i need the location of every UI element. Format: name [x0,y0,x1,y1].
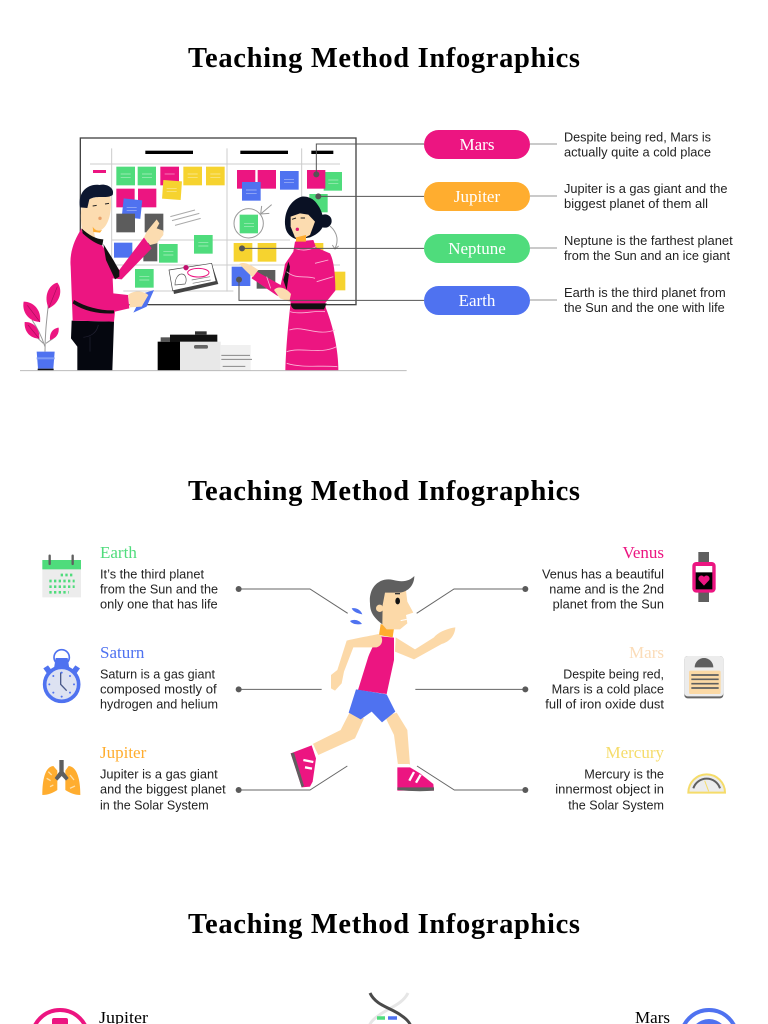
text: Earth description: Earth is the third planet from [564,286,726,300]
sticky notes [114,167,345,290]
block: Earth: It’s the third planet [100,568,205,582]
text: Jupiter description: biggest planet of them all [564,197,708,211]
block: Saturn: Saturn is a gas giant [100,668,216,682]
man [70,185,163,371]
icon: lungs [42,760,80,795]
icon: weighing scale [684,656,723,698]
block: Saturn: composed mostly of [100,682,217,696]
ground line [20,369,407,372]
block: Mars: Despite being red, [563,668,664,682]
circled note and arrow [234,205,339,249]
block: Mercury [555,743,725,812]
block: Earth: only one that has life [100,598,218,612]
pill: Mars [424,130,530,159]
pill: Jupiter [424,182,530,211]
block: Mars: Mars is a cold place [552,682,664,696]
woman [239,197,338,371]
text: Jupiter description: Jupiter is a gas giant and the [564,182,728,196]
block: Mars: full of iron oxide dust [545,698,665,712]
sweat drops [350,608,362,624]
icon: calendar [42,556,81,597]
block: Earth: Earth [100,543,137,562]
block: Saturn [43,643,218,712]
text: Mars description: Despite being red, Mars is [564,130,711,144]
text: Neptune description: Neptune is the farthest planet [564,234,733,248]
pill: Earth: Earth [459,291,496,310]
icon: blue circle [681,1010,737,1024]
block: Jupiter: Jupiter is a gas giant [100,768,218,782]
block: Mercury: Mercury is the [584,768,664,782]
block: Venus: Venus [622,543,664,562]
icon: stopwatch [43,650,80,701]
title: section 1: Teaching Method Infographics [188,43,580,74]
icon: smartwatch [692,552,716,602]
printer [158,331,252,371]
block: Venus: Venus has a beautiful [542,568,664,582]
block: Earth: from the Sun and the [100,582,218,596]
text: Neptune description: from the Sun and an ice giant [564,249,731,263]
text: Jupiter description [564,182,728,211]
block: Mars [545,643,723,712]
plant [23,283,60,371]
pill: Neptune: Neptune [448,239,506,258]
pill: Mars: Mars [460,135,494,154]
text: Mars description: actually quite a cold place [564,146,711,160]
block: Mercury: the Solar System [568,798,664,812]
illustration: running man with connectors [236,576,528,793]
pill: Neptune [424,234,530,263]
block: Earth [42,543,218,612]
title: section 3: Teaching Method Infographics [188,909,580,940]
block: Mars: Mars [629,643,664,662]
connector lines [239,589,525,790]
text: Mars description [564,130,711,160]
block: Saturn: hydrogen and helium [100,698,218,712]
callout connectors [239,144,424,300]
title: section 2: Teaching Method Infographics [188,476,580,507]
block: Jupiter: and the biggest planet [100,782,226,796]
board frame [80,138,356,305]
text: Earth description: the Sun and the one with life [564,301,725,315]
block: Jupiter [42,743,226,812]
icon: pink circle [32,1010,88,1024]
text: Neptune description [564,234,733,263]
block: Mercury: innermost object in [555,782,664,796]
pill: Jupiter: Jupiter [454,187,500,206]
runner [291,576,455,791]
icon: gauge [688,774,725,793]
icon: DNA helix [368,993,412,1024]
pinned sketch card [169,263,218,294]
block: Venus: name and is the 2nd [549,582,664,596]
block: Saturn: Saturn [100,643,145,662]
block: Venus [542,543,716,612]
pill: Earth [424,286,530,315]
block: Mercury: Mercury [605,743,664,762]
block: Venus: planet from the Sun [553,598,664,612]
illustration: teachers at planning board [20,138,424,371]
block: Jupiter: Jupiter [100,743,147,762]
block: Jupiter: in the Solar System [100,798,209,812]
text: Earth description [564,286,726,315]
